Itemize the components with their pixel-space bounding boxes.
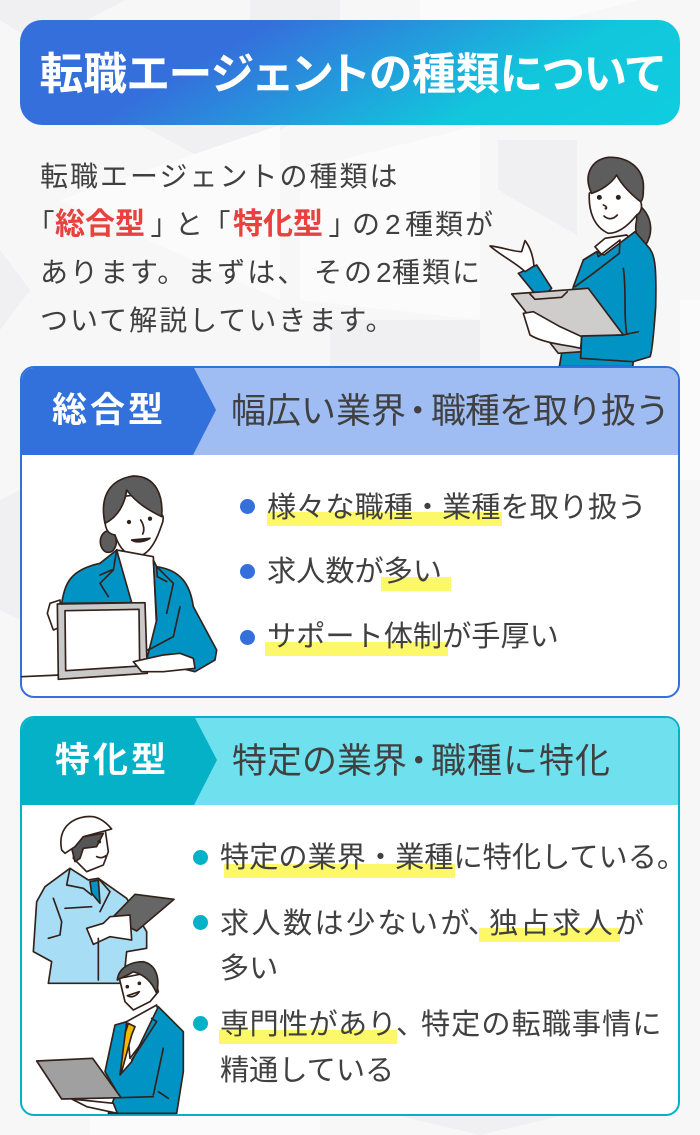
line 2: 種類が — [405, 209, 495, 240]
header subtitle: ・ — [410, 742, 428, 781]
line 2: 2 — [385, 209, 403, 240]
line 3: あります。まずは、 — [40, 257, 307, 288]
header subtitle — [232, 742, 611, 781]
line 3: 種類に — [392, 257, 482, 288]
item 3: 特定の転職事情に — [421, 1009, 662, 1041]
line 3: その — [314, 257, 374, 288]
line 3 — [40, 257, 482, 288]
item 3 — [193, 1009, 662, 1087]
header subtitle: 特定の業界 — [232, 742, 407, 781]
tab label: 総合型 — [52, 391, 166, 430]
line 2: と — [175, 209, 205, 240]
line 2: 」 — [151, 209, 167, 240]
header subtitle: 職種に特化 — [431, 742, 611, 781]
header subtitle: 職種を取り扱う — [431, 392, 669, 431]
line 2: 「 — [216, 209, 232, 240]
list: 特化型 — [193, 842, 686, 1087]
tab label: 特化型 — [55, 741, 169, 780]
header band — [22, 368, 682, 455]
line 2: 総合型 — [55, 208, 145, 241]
header subtitle: ・ — [409, 392, 427, 431]
item 1: 特定の業界・業種に特化している。 — [220, 842, 686, 874]
item 2: 求人数が多い — [267, 556, 442, 588]
item 2: 多い — [220, 953, 278, 985]
title text: 転職エージェントの種類について — [40, 50, 664, 98]
item 3: 、 — [396, 1009, 425, 1041]
intro text — [40, 161, 495, 336]
line 4: ついて解説していきます。 — [40, 305, 396, 336]
item 3: 専門性があり — [220, 1009, 397, 1041]
line 3: 2 — [376, 257, 394, 288]
line 2: 「 — [40, 209, 56, 240]
panel: 総合型 — [20, 366, 680, 698]
item 2: 、 — [468, 908, 483, 940]
item 2: 独占求人が — [489, 908, 646, 940]
item 1: 様々な職種・業種を取り扱う — [267, 492, 646, 524]
item 2: 求人数は少ないが — [220, 908, 472, 940]
header subtitle: 幅広い業界 — [231, 392, 406, 431]
header band — [22, 718, 682, 805]
item 3: 精通している — [220, 1055, 394, 1087]
list: 総合型 — [240, 492, 646, 656]
panel: 特化型 — [20, 716, 680, 1116]
title banner — [20, 20, 680, 125]
line 1: 転職エージェントの種類は — [40, 161, 399, 192]
header tab — [22, 368, 216, 455]
line 2: 」 — [329, 209, 345, 240]
header subtitle — [231, 392, 669, 431]
line 2: 特化型 — [233, 208, 323, 241]
line 2: の — [352, 209, 382, 240]
item 2 — [193, 908, 646, 985]
line 2 — [40, 208, 495, 241]
item 3: サポート体制が手厚い — [267, 621, 559, 653]
header tab — [22, 718, 217, 805]
